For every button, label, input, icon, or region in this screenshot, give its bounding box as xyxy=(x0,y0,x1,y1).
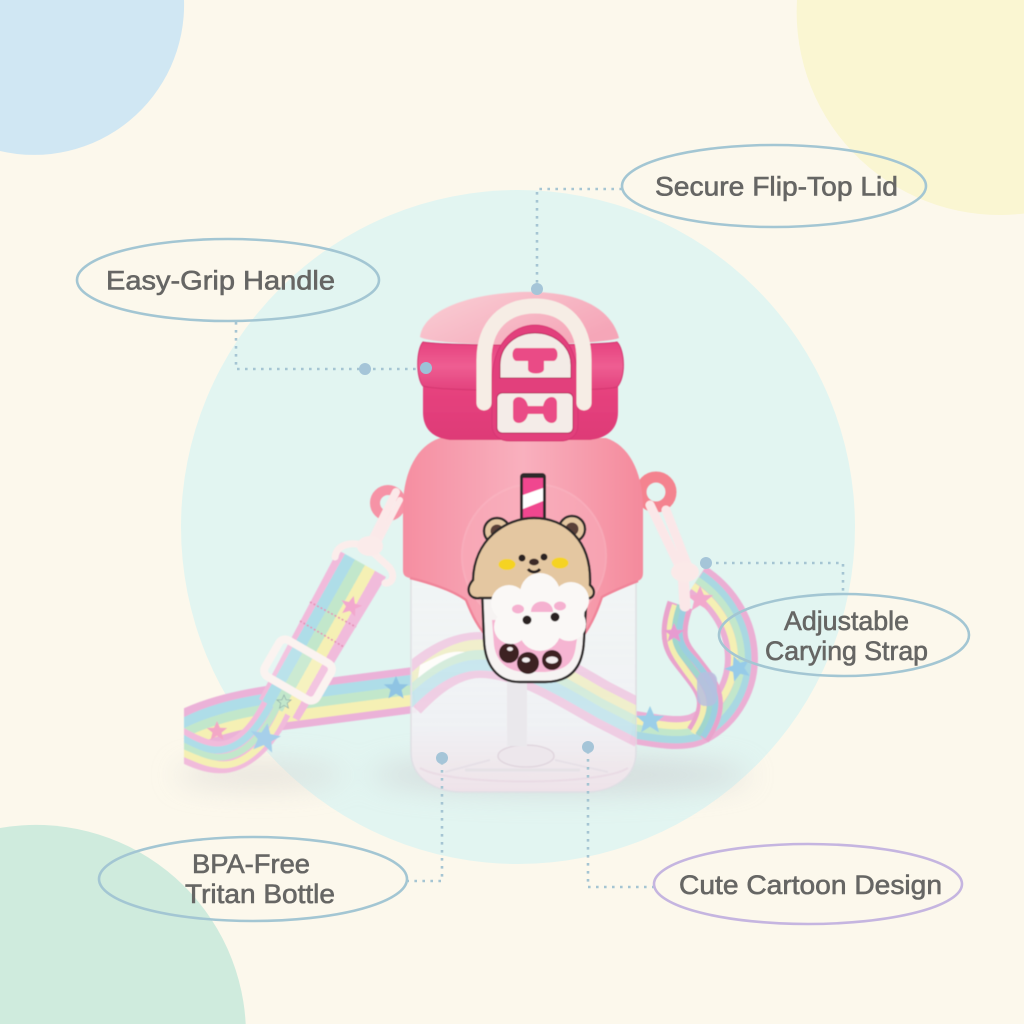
callout: BPA-Free Tritan Bottle xyxy=(99,752,448,921)
callout: Adjustable Carying Strap: Adjustable xyxy=(784,606,909,636)
strap: right lower loop xyxy=(632,575,754,739)
callout: Secure Flip-Top Lid xyxy=(531,145,926,295)
bottle: inner straw xyxy=(507,670,527,746)
decorative circle: green bottom left xyxy=(0,825,246,1024)
strap stars xyxy=(248,593,364,754)
callout: Cute Cartoon Design xyxy=(582,741,962,924)
bottle: highlight xyxy=(418,652,465,678)
bottle: pink shoulder sleeve xyxy=(403,438,643,640)
decorative circle: blue top left xyxy=(0,0,184,155)
icon: T shape xyxy=(512,348,558,374)
strap: right inner fold xyxy=(664,605,717,737)
lower curved section xyxy=(174,702,284,765)
callout: Cute Cartoon Design: Cute Cartoon Design xyxy=(679,870,942,900)
bottle: sleeve lower rim highlight xyxy=(410,578,638,640)
strap: band seen through the bottle xyxy=(404,645,645,736)
right clip xyxy=(650,505,699,606)
left attachment ring xyxy=(375,490,401,516)
callout: Easy-Grip Handle: Easy-Grip Handle xyxy=(106,266,335,296)
callout: Adjustable Carying Strap xyxy=(700,557,969,676)
decorative circle: large mint centre xyxy=(181,190,855,864)
charm bear head xyxy=(469,516,594,598)
upper straight section xyxy=(259,550,386,721)
strap: back left band xyxy=(170,676,414,752)
callout: Adjustable Carying Strap: Carying Strap xyxy=(765,636,928,666)
charm straw xyxy=(520,473,546,523)
charm cream cloud xyxy=(491,573,589,651)
bottle: base details xyxy=(420,745,628,782)
lid: cream handle arch xyxy=(484,306,584,403)
product shadow xyxy=(175,757,750,793)
strap: front left band xyxy=(174,550,386,765)
charm pink liquid xyxy=(492,620,580,672)
lid: upper latch button xyxy=(500,333,571,378)
left clip xyxy=(335,492,400,583)
product: water bottle with strap xyxy=(170,292,754,792)
lid: lower pink collar xyxy=(423,382,618,440)
callout: BPA-Free Tritan Bottle: Tritan Bottle xyxy=(185,879,335,909)
icon: bow shape xyxy=(513,397,557,423)
strap stitching xyxy=(300,602,356,647)
lid: lower latch button xyxy=(497,393,573,433)
charm cup xyxy=(482,590,587,682)
callout: Easy-Grip Handle xyxy=(77,239,432,375)
lid: grip band xyxy=(418,342,623,391)
callout: BPA-Free Tritan Bottle: BPA-Free xyxy=(192,849,310,879)
charm cloud face xyxy=(512,602,566,624)
bottle: clear Tritan body xyxy=(411,570,636,792)
charm recess xyxy=(462,484,606,628)
charm: bubble tea bear xyxy=(469,473,594,682)
lid: top dome xyxy=(420,292,619,345)
callout: Secure Flip-Top Lid: Secure Flip-Top Lid xyxy=(655,172,898,202)
charm boba pearls xyxy=(499,643,562,674)
decorative circle: yellow top right xyxy=(797,0,1024,215)
slide buckle xyxy=(262,637,334,703)
lid: button housing xyxy=(492,325,578,441)
right attachment ring xyxy=(641,477,671,507)
